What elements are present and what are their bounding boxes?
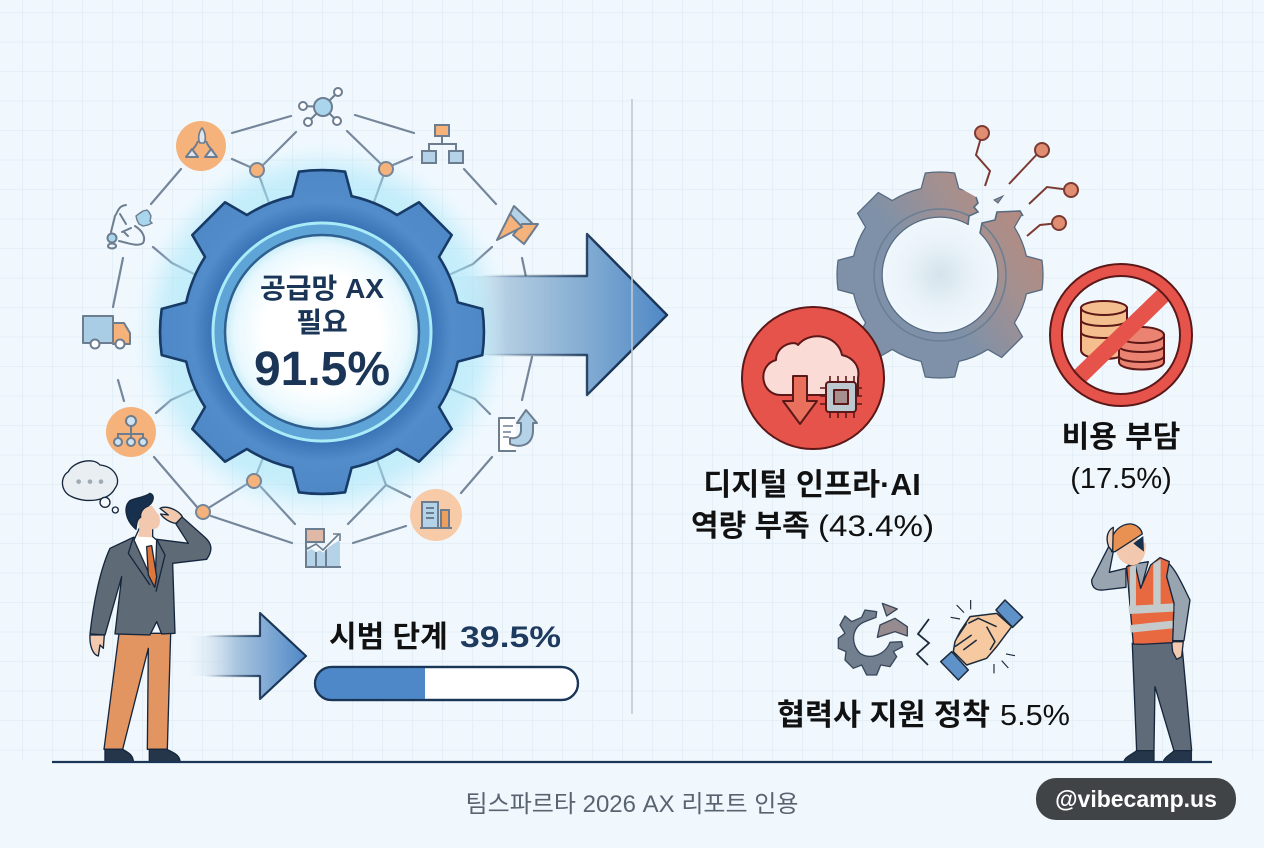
hair bbox=[126, 493, 153, 529]
hand bbox=[90, 635, 104, 656]
icon: document with arrow bbox=[499, 410, 537, 451]
raised hand bbox=[160, 507, 182, 523]
boots bbox=[1124, 751, 1191, 762]
prohibition band bbox=[1075, 292, 1167, 382]
label: cost burden: (17.5%) bbox=[1070, 463, 1172, 495]
jacket bbox=[90, 517, 211, 635]
hard hat bbox=[1111, 524, 1142, 552]
icon: paper shapes bbox=[497, 206, 538, 244]
construction worker figure bbox=[1092, 524, 1192, 762]
pilot stage label bbox=[329, 621, 561, 654]
shirt bbox=[1128, 562, 1148, 587]
label: supplier support: 협력사 지원 정착 bbox=[777, 699, 990, 732]
label: digital infrastructure: (43.4%) bbox=[818, 510, 934, 543]
shoes bbox=[105, 749, 180, 762]
label: cost burden: 비용 부담 bbox=[1062, 421, 1180, 454]
stack one bbox=[1081, 301, 1127, 359]
gear label: 공급망 AX bbox=[260, 273, 384, 304]
raised arm bbox=[1092, 547, 1126, 590]
label: digital infrastructure: 디지털 인프라·AI bbox=[703, 468, 921, 502]
icon: prohibited coins bbox=[1050, 264, 1192, 406]
hand on head bbox=[1107, 527, 1113, 552]
icon: network hub bbox=[299, 88, 342, 126]
icon: swirl process bbox=[108, 205, 152, 248]
label: digital infrastructure: 역량 부족 bbox=[691, 510, 810, 543]
small orange nodes bbox=[196, 162, 393, 519]
businessman figure bbox=[90, 493, 211, 762]
tie bbox=[147, 546, 157, 587]
broken gear bbox=[837, 172, 1043, 378]
ground line bbox=[52, 761, 1212, 763]
hand bbox=[1172, 642, 1183, 659]
gear label: 91.5% bbox=[254, 343, 390, 396]
network connector lines bbox=[113, 115, 532, 543]
icon: org tree orange node bbox=[106, 407, 156, 457]
right arm bbox=[1163, 560, 1190, 641]
icon: handshake bbox=[941, 600, 1023, 680]
face bbox=[138, 505, 160, 537]
thought bubble bbox=[62, 461, 118, 513]
stack two bbox=[1118, 327, 1164, 370]
small arrow bbox=[190, 613, 306, 699]
big arrow to barriers bbox=[452, 234, 667, 395]
gear label bbox=[254, 273, 390, 396]
label: digital infrastructure bbox=[691, 468, 934, 543]
icon: org chart bbox=[422, 125, 463, 163]
label: cost burden bbox=[1062, 421, 1180, 495]
watermark badge: @vibecamp.us bbox=[1055, 786, 1217, 812]
face bbox=[1116, 538, 1146, 565]
icon: small broken gear bbox=[838, 603, 907, 675]
shirt and neck bbox=[134, 528, 157, 587]
watermark badge bbox=[1036, 778, 1236, 820]
label: supplier support: 5.5% bbox=[1000, 700, 1070, 732]
trousers bbox=[1132, 642, 1192, 751]
icon: zigzag crack bbox=[917, 619, 929, 665]
gear label: 필요 bbox=[296, 307, 348, 338]
pilot stage label: 39.5% bbox=[460, 621, 561, 654]
broken connection wires bbox=[975, 126, 1078, 236]
icon: orange rocket node bbox=[176, 121, 226, 171]
progress bar bbox=[315, 667, 578, 700]
main gear bbox=[152, 162, 492, 502]
vertical divider bbox=[631, 99, 633, 714]
icon: rising chart bbox=[306, 529, 341, 567]
icon: cloud and chip on red circle bbox=[742, 307, 884, 449]
icon: building orange node bbox=[410, 489, 462, 541]
pilot stage label: 시범 단계 bbox=[329, 621, 448, 654]
source note: 팀스파르타 2026 AX 리포트 인용 bbox=[466, 791, 798, 818]
vest bbox=[1127, 558, 1174, 644]
trousers bbox=[104, 633, 171, 749]
icon: truck bbox=[83, 316, 130, 348]
